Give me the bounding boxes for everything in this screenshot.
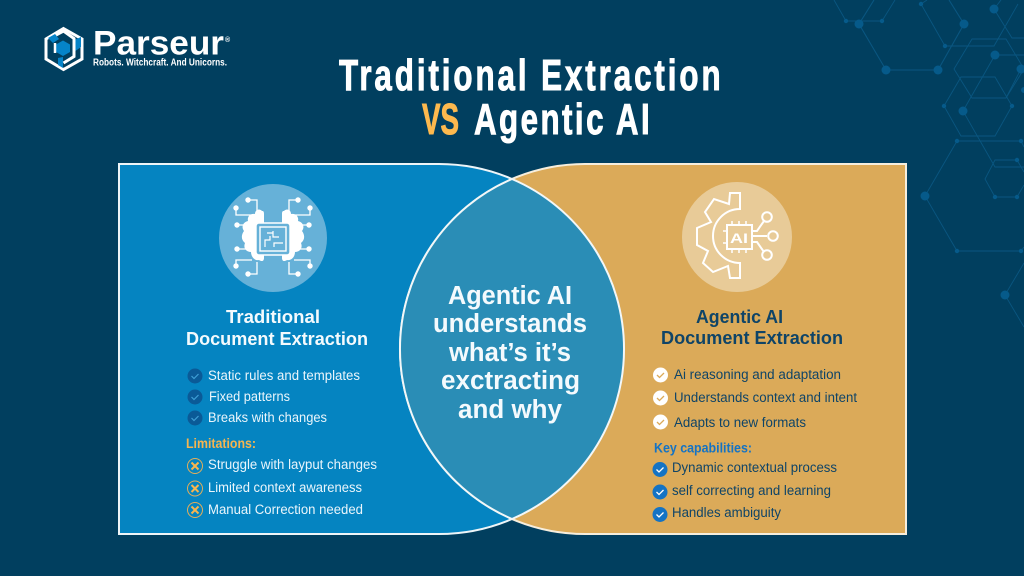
list item: Handles ambiguity — [672, 505, 781, 520]
list item: Fixed patterns — [209, 389, 290, 404]
icon: check — [653, 368, 668, 382]
list item: Limited context awareness — [208, 480, 362, 495]
logo: Parseur — [46, 24, 231, 70]
icon: check — [188, 410, 202, 426]
list: features — [188, 368, 360, 426]
list item: self correcting and learning — [672, 483, 831, 498]
icon: check — [653, 414, 668, 430]
icon: check — [652, 507, 668, 522]
title line two: VS: VS — [422, 96, 459, 144]
icon: check — [652, 484, 668, 500]
icon: check — [188, 368, 202, 384]
list: key capabilities — [652, 460, 837, 522]
overlap text — [433, 282, 587, 424]
list item: Adapts to new formats — [674, 415, 806, 430]
panel: overlap — [400, 179, 624, 519]
panel: traditional document extraction — [119, 164, 624, 534]
list item: Ai reasoning and adaptation — [674, 367, 841, 382]
background hexagon network — [834, 0, 1024, 327]
icon: check — [652, 462, 668, 477]
icon: brain circuit — [219, 184, 327, 292]
right venn shape — [400, 164, 906, 534]
list item: Static rules and templates — [208, 368, 360, 383]
list item: Dynamic contextual process — [672, 460, 837, 475]
tagline: Robots. Witchcraft. And Unicorns. — [93, 56, 227, 68]
title line two: Agentic AI: Agentic AI — [474, 96, 650, 144]
key capabilities heading: Key capabilities: — [654, 440, 752, 456]
list item: Breaks with changes — [208, 410, 327, 425]
list item: Manual Correction needed — [208, 502, 363, 517]
icon: AI gear — [682, 182, 792, 292]
overlap text: understands — [433, 310, 587, 338]
panel heading: Traditional — [226, 306, 320, 327]
icon: check — [188, 390, 202, 404]
overlap lens shape — [400, 179, 624, 519]
limitations heading: Limitations: — [186, 436, 256, 451]
icon: hexagon logo mark — [46, 28, 82, 70]
panel heading: Agentic AI — [696, 306, 783, 327]
brand name: Parseur — [93, 24, 224, 62]
list item: Struggle with layput changes — [208, 457, 377, 472]
title line one: Traditional Extraction — [339, 52, 721, 100]
icon: AI gear: AI — [730, 230, 748, 246]
overlap text: Agentic AI — [448, 282, 572, 310]
list: features — [653, 367, 857, 430]
panel heading second line: Document Extraction — [186, 328, 368, 349]
icon: cross — [188, 481, 202, 496]
overlap text: and why — [458, 396, 563, 424]
overlap text: exctracting — [441, 367, 580, 395]
left venn shape — [119, 164, 624, 534]
overlap text: what’s it’s — [448, 339, 571, 367]
list: limitations — [188, 457, 377, 518]
icon: cross — [188, 458, 202, 474]
panel: agentic AI document extraction — [400, 164, 906, 534]
registered mark: ® — [225, 36, 231, 44]
list item: Understands context and intent — [674, 390, 857, 405]
icon: cross — [188, 502, 202, 518]
icon: check — [653, 390, 668, 406]
panel heading second line: Document Extraction — [661, 327, 843, 348]
title — [339, 52, 721, 144]
